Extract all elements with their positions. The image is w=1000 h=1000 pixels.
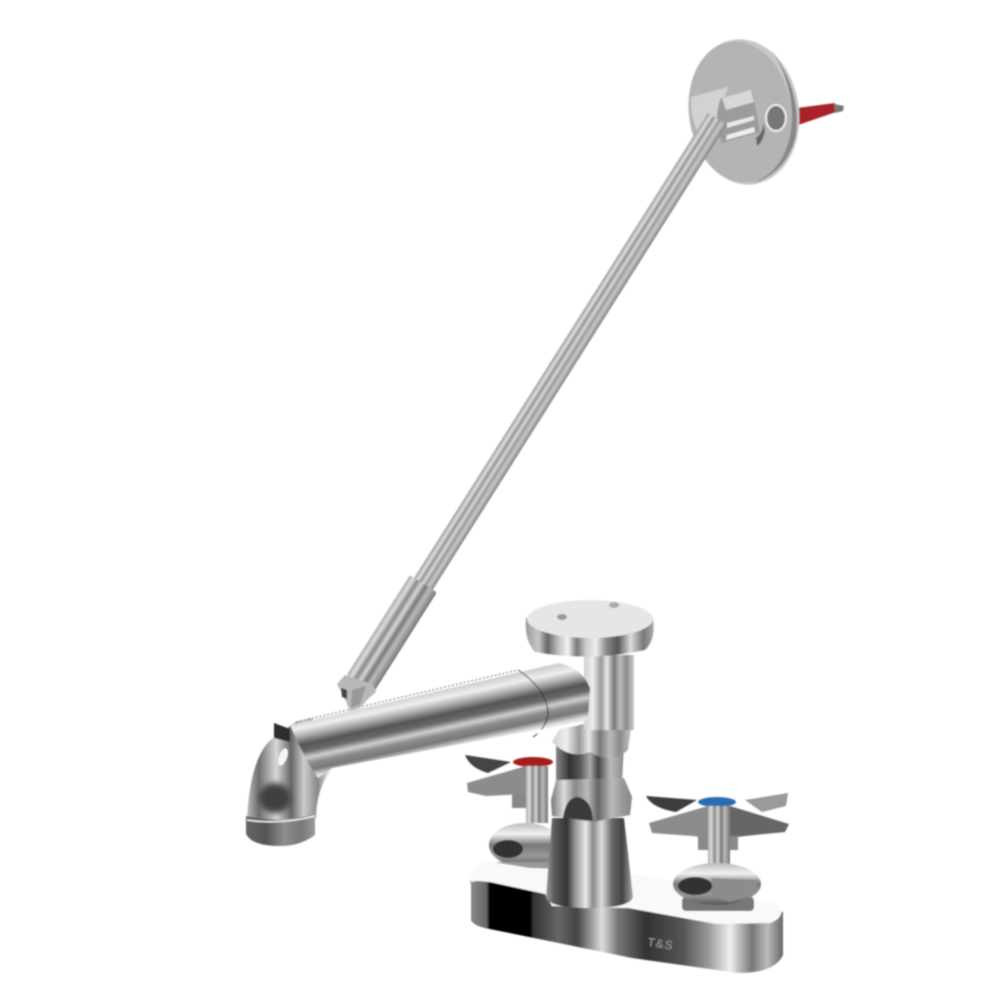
neck [556, 745, 624, 782]
threaded outlet [246, 814, 315, 846]
cold handle wings [646, 793, 789, 850]
top knob [526, 600, 654, 657]
base plate [470, 861, 783, 973]
spout tab [274, 723, 290, 742]
brace bracket [717, 90, 765, 146]
right handle (cold) [646, 793, 789, 911]
elbow dark reflection [259, 783, 291, 813]
flange screw hole [765, 104, 787, 132]
hot handle wings [465, 755, 546, 808]
flange disc [679, 32, 809, 192]
flare [552, 722, 632, 758]
cold valve dome [673, 863, 761, 905]
faucet body [546, 655, 634, 908]
base plate side [470, 880, 783, 973]
knob side [526, 618, 654, 657]
spout elbow highlight [276, 747, 290, 767]
base lettering: T&S [647, 935, 675, 953]
knob top [527, 600, 653, 638]
spout underside reflection [332, 722, 580, 773]
spout [246, 663, 590, 846]
lower body [546, 818, 633, 908]
anchor: red wall plug [797, 103, 844, 125]
rod clevis [337, 675, 376, 711]
knob screw [609, 602, 619, 608]
left handle (hot) [465, 755, 561, 870]
telescoping sleeve [347, 575, 437, 692]
hot stem [526, 766, 548, 823]
rod [403, 113, 727, 607]
wall flange with anchor [679, 32, 844, 192]
collar [551, 778, 632, 822]
cold knurled ring [682, 897, 754, 911]
cold stem [708, 806, 730, 864]
collar shadow notch [563, 797, 593, 821]
spout tube [290, 663, 590, 778]
spout joint line [518, 670, 548, 737]
spout top edge [296, 670, 518, 722]
cold indicator [698, 797, 736, 807]
spout elbow [247, 718, 345, 820]
hot valve dome [489, 823, 561, 867]
upper post [584, 655, 634, 730]
brace rod and sleeve [347, 110, 731, 692]
hot indicator [513, 757, 553, 767]
base plate top surface [471, 861, 781, 924]
